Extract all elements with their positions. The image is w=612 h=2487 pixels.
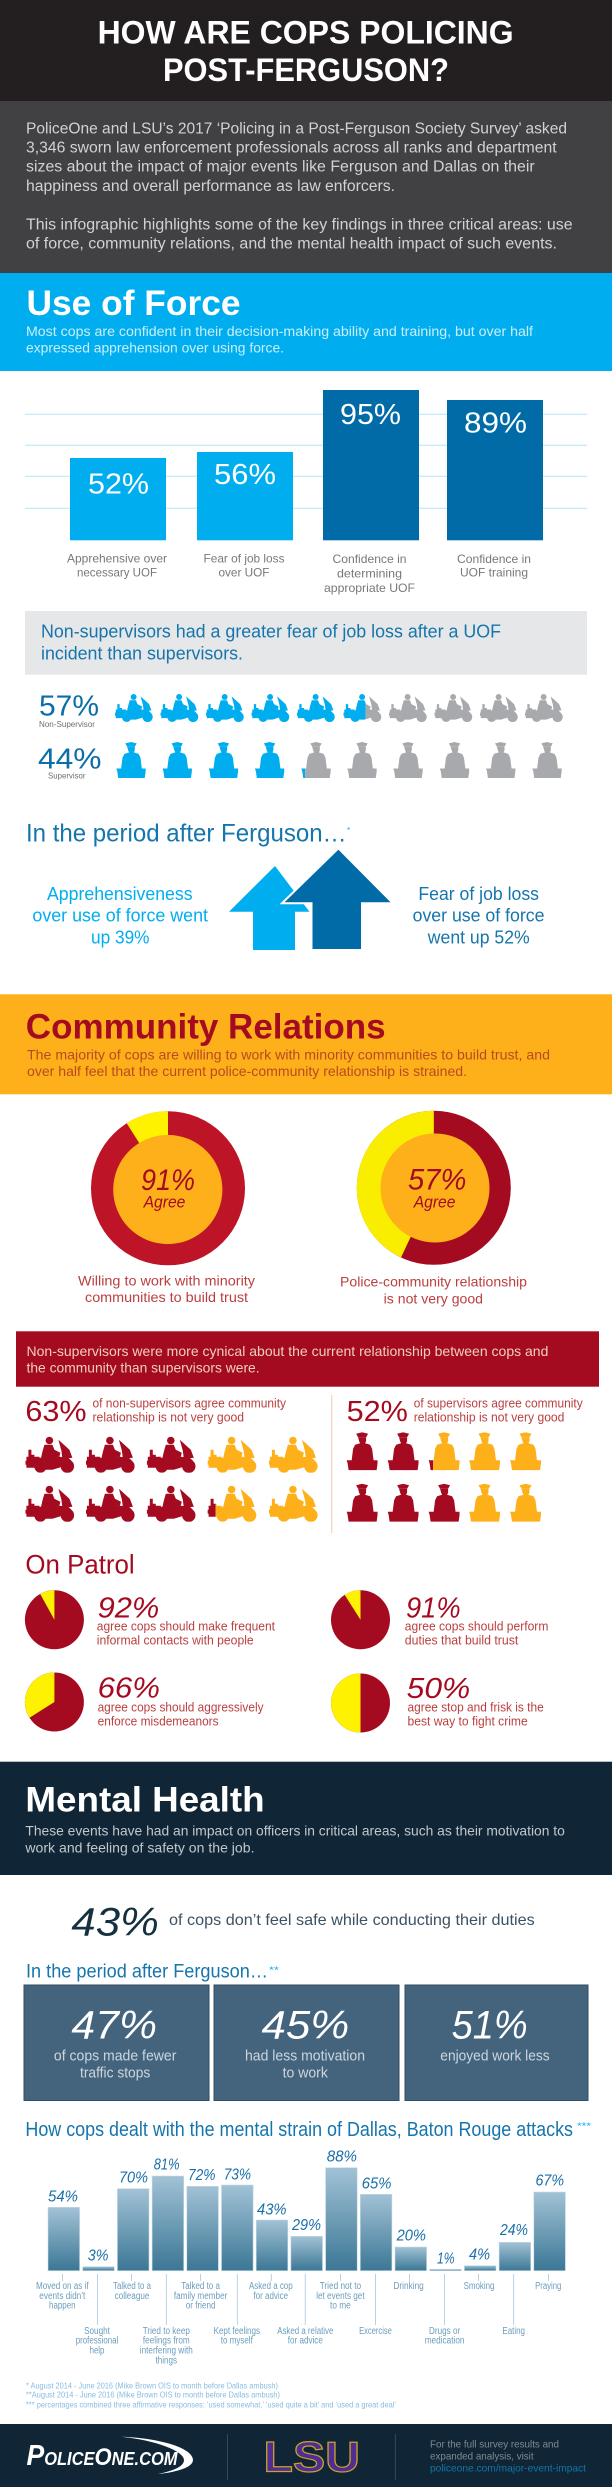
section header: use of force: expressed apprehension over using force. — [26, 341, 284, 356]
bar chart: use of force: Fear of job loss — [204, 552, 284, 566]
pictogram: 63% of non-supervisors — [25, 1396, 318, 1522]
bar chart: coping methods: Talked to a — [181, 2281, 220, 2292]
callout: non-supervisors fear of job loss: Non-supervisors had a greater fear of job loss after a UOF — [41, 622, 501, 642]
pictogram: non-supervisor 57%: 57% — [39, 691, 99, 723]
bar chart: use of force: necessary UOF — [77, 566, 157, 580]
logo: policeone.com: POLICEONE.COM — [26, 2440, 178, 2472]
logo: lsu: LSU — [264, 2434, 360, 2482]
footer link text: expanded analysis, visit — [430, 2450, 534, 2462]
bar chart: coping methods: happen — [49, 2300, 76, 2311]
stat box: 45% less motivation: to work — [283, 2066, 329, 2082]
stat: 92% frequent informal contacts — [25, 1590, 275, 1649]
bar chart: coping methods: interfering with — [140, 2346, 193, 2357]
bar chart: use of force: appropriate UOF — [324, 581, 415, 595]
heading: how cops dealt with mental strain: *** — [577, 2121, 592, 2131]
pictogram: 63% of non-supervisors: 63% — [25, 1396, 87, 1428]
intro text panel: PoliceOne and LSU’s 2017 ‘Policing in a Post-Ferguson Society Survey’ asked — [26, 120, 567, 137]
stat box: 47% fewer traffic stops: 47% — [71, 2003, 157, 2047]
stat box: 51% enjoyed work less: 51% — [452, 2003, 528, 2047]
bar chart: coping methods: 73% — [224, 2166, 251, 2183]
pictogram: 52% of supervisors — [347, 1396, 583, 1522]
bar chart: use of force: determining — [337, 566, 402, 580]
text: apprehensiveness up 39%: Apprehensiveness — [47, 884, 193, 904]
text: fear of job loss up 52%: Fear of job loss — [418, 884, 539, 904]
bar chart: coping methods: feelings from — [143, 2336, 190, 2347]
section header: community relations: over half feel that the current police-community relationship is strained. — [27, 1063, 467, 1079]
bar chart: coping methods: 88% — [327, 2148, 357, 2165]
bar chart: coping methods: Drugs or — [429, 2326, 461, 2337]
bar chart: use of force: Confidence in — [332, 552, 406, 566]
section header: mental health: work and feeling of safety on the job. — [24, 1839, 254, 1855]
donut chart: 57% relationship is not very good — [340, 1111, 527, 1306]
text: apprehensiveness up 39%: up 39% — [91, 927, 150, 947]
bar chart: coping methods: 43% — [257, 2201, 286, 2218]
donut chart: 57% relationship is not very good: 57% — [408, 1163, 466, 1196]
bar chart: coping methods: 72% — [188, 2167, 216, 2184]
stat: 50% stop and frisk: agree stop and frisk is the — [408, 1700, 544, 1715]
bar chart: use of force: 52% — [88, 468, 149, 500]
bar chart: coping methods: for advice — [253, 2291, 288, 2302]
heading: in the period after ferguson: In the period after Ferguson… — [26, 820, 347, 848]
bar chart: use of force: Confidence in — [457, 552, 531, 566]
callout: non-supervisors more cynical: Non-supervisors were more cynical about the current relationship between cops and — [26, 1343, 548, 1359]
section header: community relations — [0, 994, 612, 1094]
footnotes — [26, 2380, 396, 2410]
stat: 92% frequent informal contacts: agree cops should make frequent — [97, 1619, 275, 1634]
footer link text — [430, 2438, 586, 2475]
heading: in the period after ferguson: * — [347, 826, 350, 835]
stat box: 45% less motivation: 45% — [262, 2003, 349, 2047]
header: title — [0, 0, 612, 101]
donut chart: 91% willing to work with minority communities: 91% — [141, 1164, 195, 1197]
bar chart: coping methods: Sought — [84, 2326, 110, 2337]
stat: 66% enforce misdemeanors: 66% — [98, 1672, 160, 1704]
pictogram: supervisor 44%: 44% — [38, 743, 102, 775]
stat: 66% enforce misdemeanors: enforce misdemeanors — [98, 1714, 219, 1729]
pictogram: 52% of supervisors: relationship is not very good — [414, 1410, 564, 1425]
stat: 66% enforce misdemeanors — [25, 1672, 264, 1732]
bar chart: use of force: UOF training — [460, 566, 528, 580]
heading: in the period after ferguson (mental health): In the period after Ferguson… — [26, 1962, 268, 1983]
footnotes: *** percentages combined three affirmative responses: ‘used somewhat,’ ‘used quite a bit’ and ‘used a great deal’ — [26, 2400, 396, 2410]
bar chart: use of force: 95% — [340, 399, 401, 431]
section header: mental health: Mental Health — [25, 1781, 265, 1820]
stat box: 47% fewer traffic stops: of cops made fewer — [54, 2049, 177, 2065]
stat: 92% frequent informal contacts: 92% — [98, 1592, 159, 1624]
pictogram: 63% of non-supervisors: relationship is not very good — [92, 1410, 244, 1425]
stat: 92% frequent informal contacts: informal contacts with people — [97, 1633, 254, 1648]
heading: in the period after ferguson (mental health): ** — [269, 1965, 280, 1975]
intro text panel: This infographic highlights some of the key findings in three critical areas: use — [26, 216, 573, 233]
bar chart: use of force: over UOF — [218, 566, 270, 580]
stat: 50% stop and frisk: 50% — [407, 1673, 470, 1705]
bar chart: coping methods — [36, 2148, 565, 2366]
section header: mental health — [0, 1762, 612, 1875]
stat: 91% duties that build trust — [331, 1590, 548, 1649]
text: fear of job loss up 52% — [413, 884, 544, 947]
bar chart: coping methods: events didn’t — [39, 2291, 85, 2302]
bar chart: use of force: 56% — [214, 459, 276, 491]
bar chart: coping methods: 65% — [362, 2175, 392, 2192]
bar chart: coping methods: for advice — [288, 2336, 323, 2347]
bar chart: coping methods: professional — [76, 2336, 118, 2347]
stat: 91% duties that build trust: duties that build trust — [405, 1633, 519, 1648]
bar chart: coping methods: Moved on as if — [36, 2281, 89, 2292]
text: fear of job loss up 52%: over use of force — [413, 906, 544, 926]
stat: 43% don't feel safe — [71, 1901, 535, 1945]
stat: 50% stop and frisk — [331, 1673, 544, 1732]
section header: mental health: These events have had an impact on officers in critical areas, such as their motivation to — [25, 1823, 565, 1839]
bar chart: coping methods: family member — [174, 2291, 228, 2302]
bar chart: coping methods: Asked a relative — [277, 2326, 334, 2337]
bar chart: use of force: Apprehensive over — [67, 552, 167, 566]
bar chart: coping methods: to myself — [221, 2336, 253, 2347]
bar chart: coping methods: 67% — [536, 2173, 564, 2190]
stat box: 45% less motivation — [214, 1985, 399, 2100]
stat box: 47% fewer traffic stops — [24, 1985, 209, 2100]
pictogram: non-supervisor 57% — [39, 691, 563, 729]
pictogram: 52% of supervisors: 52% — [347, 1396, 408, 1428]
text: apprehensiveness up 39%: over use of force went — [32, 906, 208, 926]
stat: 91% duties that build trust: agree cops should perform — [405, 1619, 548, 1634]
bar chart: coping methods: 54% — [48, 2189, 78, 2206]
footer link text: policeone.com/major-event-impact — [430, 2463, 586, 2475]
bar chart: coping methods: Praying — [535, 2281, 561, 2292]
stat box: 51% enjoyed work less: enjoyed work less — [440, 2049, 550, 2065]
section header: use of force — [0, 273, 612, 371]
heading: on patrol: On Patrol — [25, 1549, 135, 1579]
bar chart: coping methods: Talked to a — [113, 2281, 151, 2292]
bar chart: coping methods: 4% — [469, 2246, 490, 2263]
bar chart: coping methods: Excercise — [359, 2326, 392, 2337]
bar chart: coping methods: 20% — [396, 2227, 426, 2244]
intro text panel — [0, 101, 612, 273]
bar chart: use of force — [25, 390, 587, 595]
donut chart: 91% willing to work with minority communities: Willing to work with minority — [78, 1273, 255, 1289]
intro text panel: of force, community relations, and the mental health impact of such events. — [26, 236, 557, 253]
pictogram: non-supervisor 57%: Non-Supervisor — [39, 719, 95, 729]
bar chart: coping methods: to me — [330, 2300, 351, 2311]
callout: non-supervisors more cynical: the community than supervisors were. — [26, 1360, 260, 1376]
donut chart: 57% relationship is not very good: Agree — [413, 1192, 456, 1211]
callout: non-supervisors fear of job loss: incident than supervisors. — [41, 643, 243, 663]
intro text panel: 3,346 sworn law enforcement professionals across all ranks and department — [26, 140, 557, 157]
header: title: POST-FERGUSON? — [163, 52, 449, 88]
bar chart: coping methods: Kept feelings — [214, 2326, 260, 2337]
intro text panel: happiness and overall performance as law enforcers. — [26, 178, 395, 195]
stat box: 47% fewer traffic stops: traffic stops — [80, 2066, 150, 2082]
text: fear of job loss up 52%: went up 52% — [427, 927, 530, 947]
bar chart: coping methods: Smoking — [464, 2281, 494, 2292]
stat: 66% enforce misdemeanors: agree cops should aggressively — [98, 1700, 264, 1715]
bar chart: coping methods: 1% — [437, 2250, 455, 2267]
donut chart: 91% willing to work with minority communities — [78, 1111, 255, 1305]
bar chart: coping methods: Eating — [502, 2326, 525, 2337]
bar chart: coping methods: colleague — [115, 2291, 150, 2302]
intro text panel: sizes about the impact of major events like Ferguson and Dallas on their — [26, 159, 535, 176]
footnotes: * August 2014 - June 2016 (Mike Brown OIS to month before Dallas ambush) — [26, 2380, 278, 2390]
stat: 91% duties that build trust: 91% — [406, 1592, 461, 1624]
bar chart: coping methods: Drinking — [393, 2281, 424, 2292]
bar chart: coping methods: 3% — [88, 2248, 108, 2265]
footer link text: For the full survey results and — [430, 2438, 559, 2450]
donut chart: 91% willing to work with minority communities: communities to build trust — [85, 1289, 248, 1305]
bar chart: coping methods: medication — [425, 2336, 464, 2347]
bar chart: coping methods: Asked a cop — [249, 2281, 293, 2292]
bar chart: coping methods: 81% — [154, 2156, 180, 2173]
section header: use of force: Use of Force — [26, 284, 240, 323]
donut chart: 57% relationship is not very good: Police-community relationship — [340, 1274, 527, 1290]
pictogram: supervisor 44%: Supervisor — [48, 771, 86, 781]
stat: 50% stop and frisk: best way to fight crime — [408, 1714, 528, 1729]
donut chart: 91% willing to work with minority communities: Agree — [143, 1192, 185, 1211]
header: title: HOW ARE COPS POLICING — [98, 14, 514, 50]
pictogram: supervisor 44% — [38, 742, 562, 781]
stat box: 45% less motivation: had less motivation — [245, 2049, 365, 2065]
footnotes: **August 2014 - June 2016 (Mike Brown OIS to month before Dallas ambush) — [26, 2390, 280, 2400]
section header: use of force: Most cops are confident in their decision-making ability and training, but over half — [26, 324, 533, 339]
bar chart: coping methods: or friend — [186, 2300, 215, 2311]
pictogram: 52% of supervisors: of supervisors agree community — [414, 1396, 583, 1411]
section header: community relations: Community Relations — [26, 1007, 386, 1046]
bar chart: coping methods: Tried to keep — [143, 2326, 190, 2337]
stat box: 51% enjoyed work less — [405, 1985, 588, 2100]
bar chart: coping methods: Tried not to — [320, 2281, 361, 2292]
callout: non-supervisors more cynical — [16, 1331, 599, 1387]
icon: up arrows — [229, 848, 393, 950]
section header: community relations: The majority of cops are willing to work with minority communities to build trust, and — [27, 1046, 550, 1062]
stat: 43% don't feel safe: of cops don’t feel safe while conducting their duties — [169, 1912, 535, 1929]
bar chart: use of force: 89% — [464, 408, 527, 440]
footer — [0, 2424, 612, 2487]
donut chart: 57% relationship is not very good: is not very good — [384, 1290, 483, 1306]
bar chart: coping methods: let events get — [316, 2291, 365, 2302]
bar chart: coping methods: things — [156, 2355, 177, 2366]
text: apprehensiveness up 39% — [32, 884, 208, 947]
stat: 43% don't feel safe: 43% — [71, 1901, 159, 1945]
pictogram: 63% of non-supervisors: of non-supervisors agree community — [92, 1396, 286, 1411]
bar chart: coping methods: 70% — [119, 2170, 148, 2187]
callout: non-supervisors fear of job loss — [25, 611, 587, 675]
bar chart: coping methods: help — [90, 2346, 105, 2357]
bar chart: coping methods: 24% — [499, 2222, 528, 2239]
bar chart: coping methods: 29% — [291, 2217, 321, 2234]
